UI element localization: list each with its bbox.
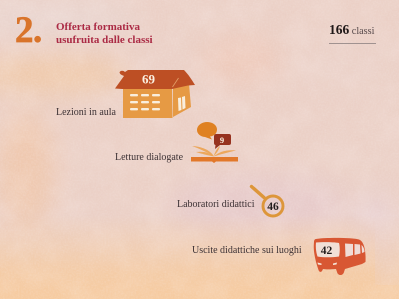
label: laboratori didattici: Laboratori didattici — [177, 199, 254, 210]
icon: magnifying glass — [250, 184, 284, 218]
value 9: 9 — [220, 135, 224, 145]
side windows — [345, 244, 353, 257]
icon: book with speech bubbles — [191, 122, 238, 163]
title: usufruita dalle classi — [56, 34, 153, 46]
open book — [191, 146, 238, 163]
title — [56, 21, 153, 46]
headlights — [318, 262, 322, 265]
value 46: 46 — [267, 201, 279, 213]
handle — [252, 186, 264, 198]
value 69: 69 — [142, 72, 156, 86]
value 42: 42 — [321, 245, 332, 257]
label: letture dialogate: Letture dialogate — [115, 152, 183, 163]
house side wall — [173, 84, 191, 117]
label: uscite didattiche: Uscite didattiche sui luoghi — [192, 245, 302, 256]
orange bubble — [197, 122, 217, 140]
icon: bus — [314, 238, 366, 275]
windows — [130, 94, 186, 111]
total classes: 166 classi — [329, 22, 374, 37]
roof — [115, 70, 195, 89]
icon: school house — [115, 70, 195, 118]
total underline — [329, 43, 376, 44]
house wall — [123, 87, 172, 118]
roof crease — [172, 78, 178, 87]
bus body — [314, 238, 366, 275]
title: Offerta formativa — [56, 21, 140, 33]
label: lezioni in aula: Lezioni in aula — [56, 107, 116, 118]
windshield — [316, 242, 340, 257]
red bubble — [214, 134, 231, 149]
lens — [263, 196, 283, 216]
section number: 2. — [15, 10, 42, 51]
